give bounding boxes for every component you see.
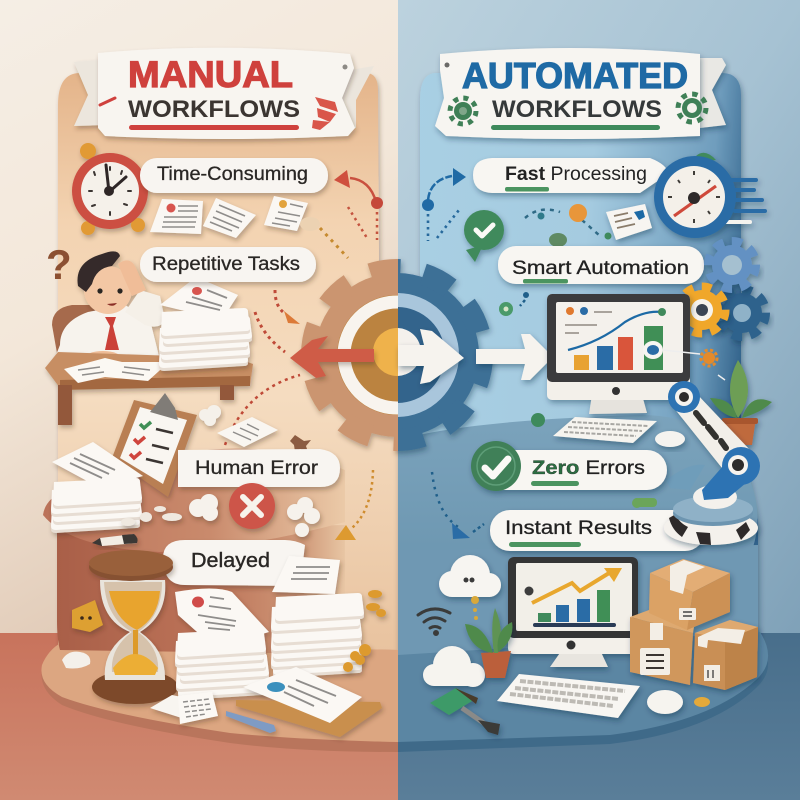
paper 2 <box>203 198 256 238</box>
cotton blob <box>62 652 90 668</box>
box lower right <box>693 620 758 690</box>
box lower left <box>630 606 695 685</box>
desk <box>45 352 253 425</box>
paper 3 <box>264 196 308 231</box>
dotted trail below arrow <box>225 375 300 445</box>
orange dotted trail <box>320 228 348 258</box>
green pin <box>632 498 657 508</box>
crumpled paper right <box>287 497 320 537</box>
dotted connector with orange dot <box>525 204 612 240</box>
label: Instant Results <box>490 510 705 551</box>
icon: cloud top <box>439 555 501 597</box>
lower platform <box>398 640 768 752</box>
icon: document card <box>606 204 652 240</box>
title: AUTOMATED: AUTOMATED <box>462 55 688 96</box>
label: Fast Processing: Fast Processing <box>505 164 647 185</box>
label: Time-Consuming <box>140 158 328 193</box>
gear icon left <box>450 98 476 124</box>
label: Zero Errors <box>531 458 645 486</box>
chair <box>52 305 100 370</box>
keyboard lower <box>497 674 640 718</box>
dashboard marks <box>566 307 574 315</box>
hand on desk <box>85 351 121 365</box>
icon: green check pin <box>464 210 504 262</box>
bar chart <box>574 326 663 370</box>
green ball <box>531 413 545 427</box>
label: Human Error: Human Error <box>195 458 319 479</box>
icon: question mark: ? <box>46 241 72 288</box>
raised arm <box>125 290 165 327</box>
arrow: white arrow out of gear <box>398 329 464 384</box>
plant: lower potted plant <box>465 608 512 678</box>
robot neck <box>693 485 737 509</box>
gear icon right <box>678 94 706 122</box>
label: Instant Results: Instant Results <box>505 518 652 539</box>
base platform <box>41 645 398 752</box>
paper stack on shelf <box>51 442 143 533</box>
loose small papers <box>150 692 218 724</box>
dotted connector to monitor <box>499 292 529 316</box>
center gear: manual half <box>300 259 398 456</box>
gears cluster <box>679 242 765 336</box>
icon: cloud bottom <box>423 646 485 687</box>
background: manual side floor <box>0 633 398 800</box>
open book <box>64 358 169 383</box>
underline accent <box>491 125 660 130</box>
box top <box>649 559 730 630</box>
arm segment <box>670 392 750 468</box>
trend line <box>568 312 662 350</box>
crumpled paper <box>199 405 221 426</box>
label: Smart Automation: Smart Automation <box>512 258 689 279</box>
background: manual side wall <box>0 0 398 640</box>
marker pen <box>92 534 138 546</box>
mouse upper <box>655 431 685 447</box>
robot base dish <box>673 500 753 526</box>
icon: alarm clock <box>72 143 148 235</box>
background: automated side floor <box>398 633 800 800</box>
title: WORKFLOWS: WORKFLOWS <box>492 96 662 123</box>
paper 1 <box>150 199 203 234</box>
label: Smart Automation <box>498 246 704 284</box>
banner: automated workflows <box>435 48 726 139</box>
arrow: curved red return arrow <box>334 170 383 240</box>
arrow: blue curved arrow <box>422 168 466 241</box>
robot joint <box>702 458 752 500</box>
top sheet <box>52 442 143 488</box>
cardboard boxes <box>630 559 758 690</box>
upper platform <box>398 415 758 560</box>
character: worried office worker <box>56 251 165 365</box>
gold blobs <box>343 590 386 672</box>
blue pen <box>226 711 276 733</box>
arrow: white arrow to monitor <box>476 334 553 380</box>
underline accent <box>129 125 299 130</box>
small dots below cloud <box>471 596 479 620</box>
head <box>84 266 132 314</box>
panel: manual workflows board <box>58 73 398 660</box>
small orange gear connector <box>663 350 725 380</box>
scattered papers row <box>150 196 308 238</box>
check marks <box>140 422 151 428</box>
top sheet <box>175 588 269 648</box>
robot treaded base <box>664 511 758 545</box>
node <box>643 341 663 359</box>
center ring: manual half <box>337 295 398 415</box>
arrow: orange dotted arrow <box>335 470 373 540</box>
label: Delayed <box>163 540 305 586</box>
keyboard upper <box>553 417 657 443</box>
notebook with papers <box>236 667 382 737</box>
gear: dark blue <box>719 290 765 336</box>
top sheet <box>272 556 340 594</box>
panel: automated workflows board <box>398 73 758 700</box>
automated platforms <box>398 415 768 752</box>
green card and brush <box>430 688 500 735</box>
rear column <box>398 545 758 700</box>
green blob <box>549 233 567 247</box>
gold coin <box>694 697 710 707</box>
star blob <box>290 435 311 452</box>
tie <box>105 317 119 350</box>
bars <box>538 613 551 622</box>
icon: green check badge <box>471 441 667 491</box>
label: Time-Consuming: Time-Consuming <box>157 164 308 185</box>
trend arrow <box>532 570 614 603</box>
crumpled paper left <box>189 494 218 521</box>
ribbon scribble <box>312 97 338 130</box>
label: Zero Errors: Zero Errors <box>532 458 645 479</box>
robot top head <box>668 381 700 413</box>
center ring: automated half <box>398 293 459 417</box>
small paper rolls <box>121 506 182 526</box>
label: Fast Processing <box>473 158 668 193</box>
monitor with analytics <box>547 294 690 414</box>
blue curl <box>666 465 705 490</box>
icon: hourglass <box>89 550 178 704</box>
blob <box>300 217 320 231</box>
paper stack right <box>271 556 364 678</box>
mouse lower <box>647 690 683 714</box>
banner: manual workflows <box>74 48 374 139</box>
label: Delayed: Delayed <box>191 550 270 572</box>
gear: orange <box>679 287 725 333</box>
dash accent <box>100 98 115 105</box>
hair <box>78 251 120 292</box>
label: Repetitive Tasks <box>140 247 316 282</box>
gear: light blue <box>709 242 755 288</box>
clipboard checklist <box>112 393 197 497</box>
background: automated side wall <box>398 0 800 640</box>
label: Repetitive Tasks: Repetitive Tasks <box>152 254 300 275</box>
plant: upper potted plant <box>710 360 772 445</box>
icon: red X <box>229 483 275 529</box>
upper shelf <box>43 449 345 552</box>
arrow: dotted arrow to results <box>432 472 484 539</box>
label pill: Zero Errors <box>480 450 667 490</box>
label: Human Error <box>178 449 340 487</box>
icon: wifi <box>418 609 450 634</box>
paper stack on desk <box>159 277 252 371</box>
cylinder column <box>57 525 345 654</box>
manual shelf and base platform <box>41 449 398 752</box>
icon: speedometer stopwatch <box>654 153 765 238</box>
top sheet <box>160 277 238 320</box>
dotted red trail with orange tip <box>255 290 300 352</box>
honey bee blob <box>72 600 103 632</box>
title: WORKFLOWS: WORKFLOWS <box>128 96 300 123</box>
title: MANUAL: MANUAL <box>128 54 293 95</box>
center gear: automated half <box>398 258 497 457</box>
monitor lower <box>508 557 638 667</box>
robot arm <box>664 381 760 545</box>
arrow: left red process arrow <box>290 336 374 378</box>
tilted paper <box>217 417 278 447</box>
hand on head <box>118 260 146 296</box>
shirt body <box>56 305 160 365</box>
paper stack center <box>175 588 269 700</box>
